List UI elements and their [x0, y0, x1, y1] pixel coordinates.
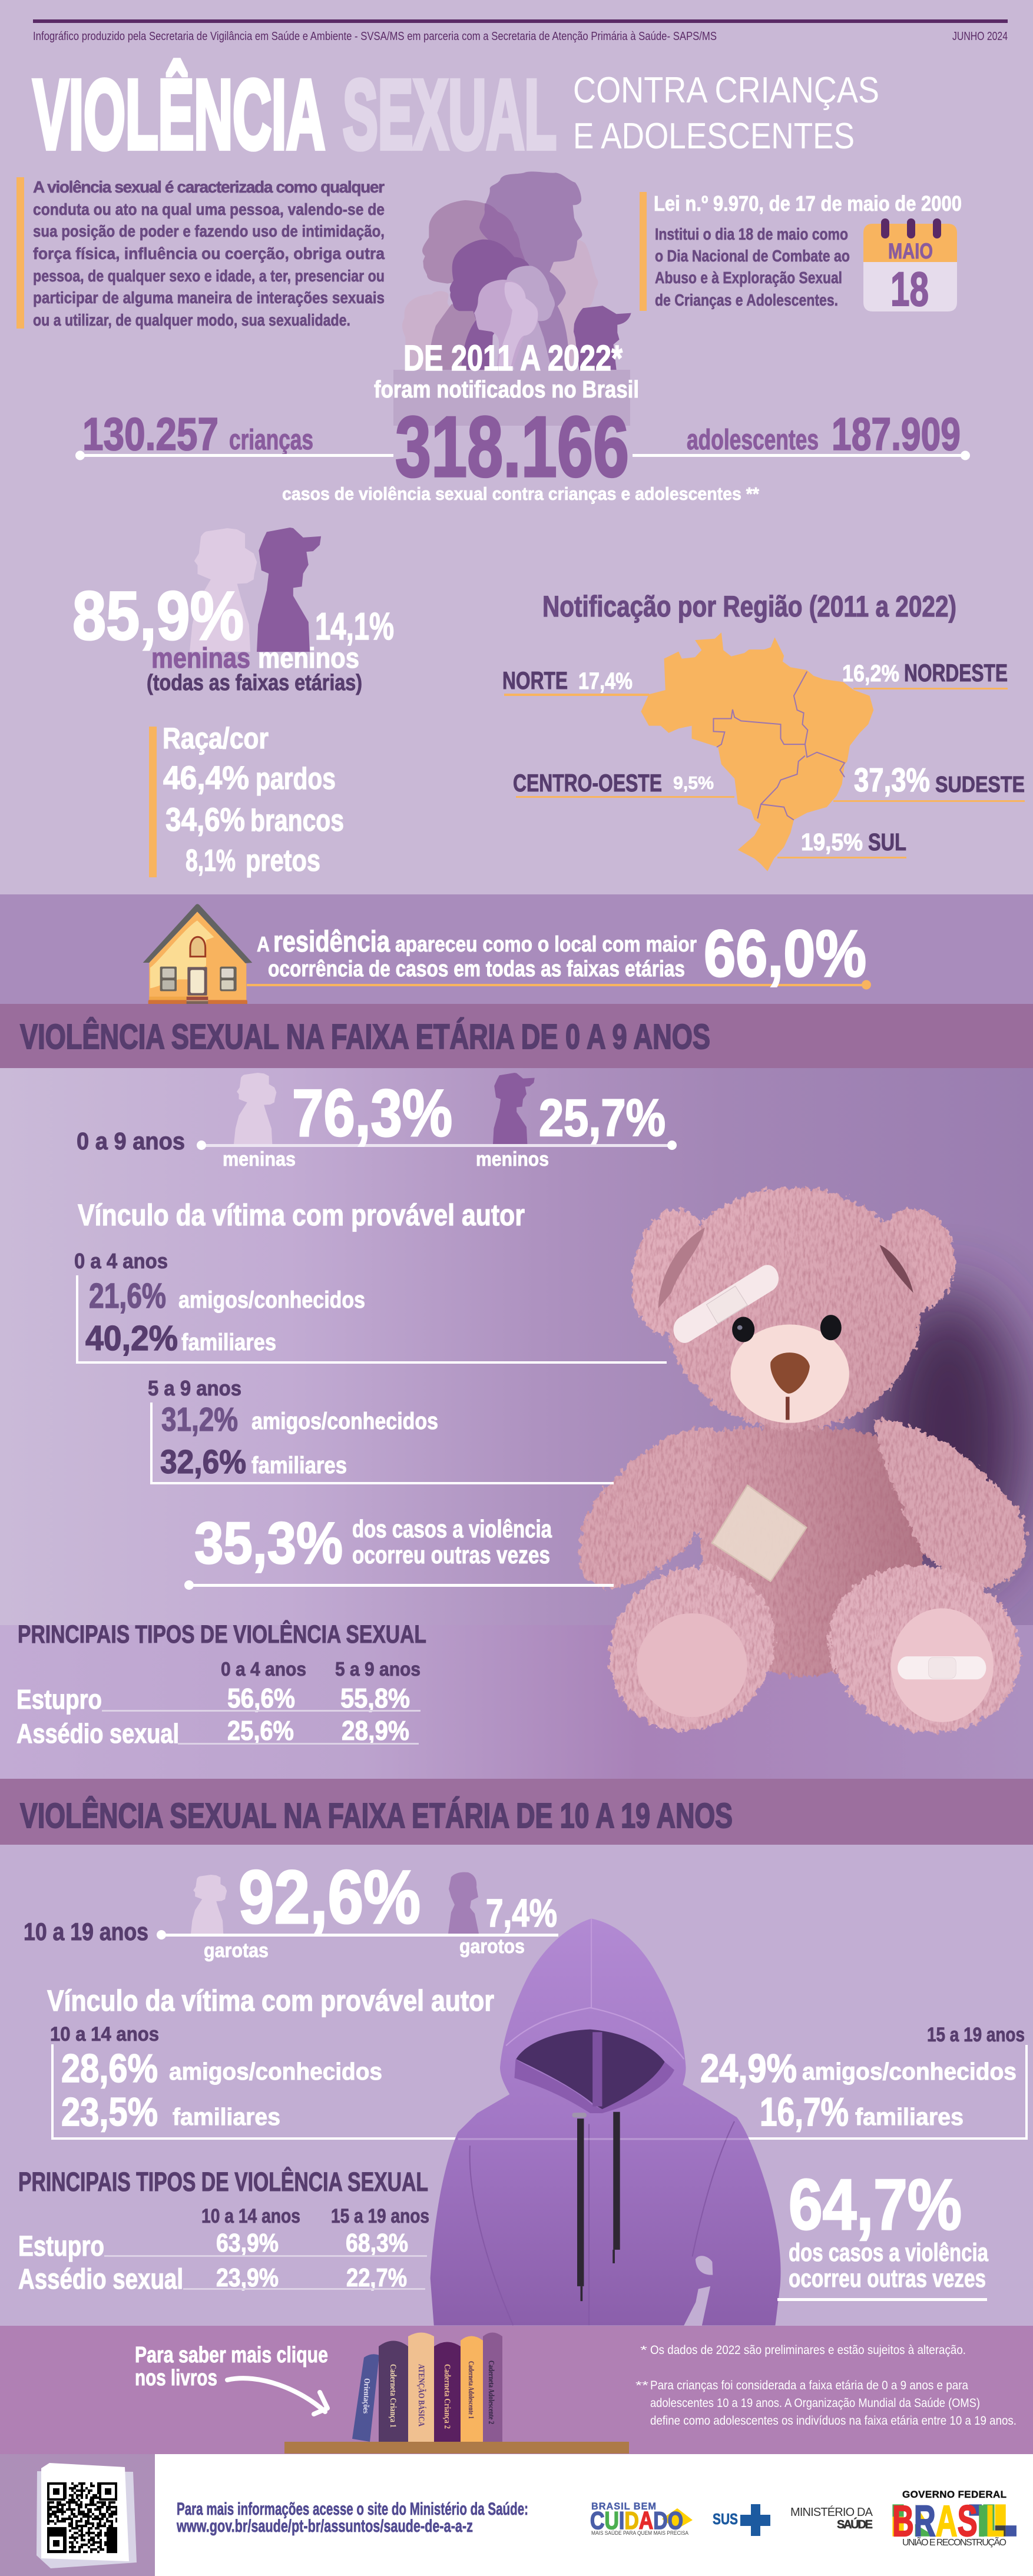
text block: footnotes: adolescentes 10 a 19 anos. A Organização Mundial da Saúde (OMS)	[650, 2396, 980, 2410]
title: SEXUAL	[343, 60, 557, 170]
panel: total cases: crianças	[229, 425, 313, 456]
text block: footnotes	[635, 2343, 1017, 2428]
text block: law: Lei n.º 9.970, de 17 de maio de 2000	[654, 191, 962, 216]
panel: total cases: 130.257	[82, 408, 218, 460]
panel: meninas e meninos 0 a 9 anos: 0 a 9 anos	[77, 1128, 185, 1155]
arrow: to books	[227, 2378, 327, 2414]
text block: definition: A violência sexual é caracterizada como qualquer	[33, 178, 385, 196]
panel: books band	[0, 2326, 1033, 2454]
logo: Ministério da Saúde: MINISTÉRIO DA	[790, 2505, 873, 2519]
text block: law: o Dia Nacional de Combate ao	[655, 247, 850, 265]
panel: residência: A	[257, 932, 270, 956]
text block: definition: pessoa, de qualquer sexo e idade, a ter, presenciar ou	[33, 267, 385, 285]
map labels: SUL	[868, 828, 906, 856]
panel: vínculo 0 a 9 anos: familiares	[181, 1330, 276, 1355]
panel: vínculo 10 a 19 anos: familiares	[855, 2103, 964, 2130]
text block: definition: ou a utilizar, de qualquer modo, sua sexualidade.	[33, 311, 350, 329]
illustration: silhouettes of people	[402, 171, 631, 370]
illustration: books on shelf: ATENÇÃO BÁSICA	[416, 2364, 427, 2426]
table: tipos 0 a 9 anos: Assédio sexual	[16, 1718, 179, 1749]
logo: Brasil Bem Cuidado: CUIDADO	[590, 2507, 683, 2534]
table: tipos 10 a 19 anos: Assédio sexual	[18, 2264, 183, 2295]
text block: definition: participar de alguma maneira de interações sexuais	[33, 289, 385, 307]
panel: vínculo 0 a 9 anos: 21,6%	[89, 1277, 166, 1315]
map labels	[502, 659, 1025, 858]
table: tipos 10 a 19 anos: 10 a 14 anos	[201, 2205, 300, 2227]
panel: raça/cor: Raça/cor	[163, 722, 269, 755]
panel: raça/cor: pardos	[256, 762, 336, 796]
text block: law: de Crianças e Adolescentes.	[655, 291, 838, 309]
panel: total cases: foram notificados no Brasil	[374, 376, 639, 403]
map: Brazil regions	[641, 632, 873, 871]
table: tipos 10 a 19 anos: 15 a 19 anos	[331, 2205, 429, 2227]
callout: 35,3%: dos casos a violência	[352, 1515, 552, 1543]
table: tipos 0 a 9 anos: 56,6%	[227, 1683, 295, 1713]
panel: meninas e meninos 10 a 19 anos: garotas	[204, 1940, 269, 1962]
text block: definition: conduta ou ato na qual uma pessoa, valendo-se de	[33, 200, 385, 218]
logo: Brasil Bem Cuidado: MAIS SAÚDE PARA QUEM MAIS PRECISA	[591, 2530, 688, 2536]
panel: residência: 66,0%	[704, 917, 866, 990]
map labels: 9,5%	[673, 773, 714, 793]
panel: meninas e meninos 10 a 19 anos: 10 a 19 anos	[24, 1918, 148, 1945]
illustration: books on shelf: Caderneta Criança 2	[442, 2364, 452, 2429]
panel: meninas e meninos: 85,9%	[72, 577, 244, 654]
illustration: books on shelf	[284, 2333, 629, 2454]
map labels: CENTRO-OESTE	[513, 769, 662, 797]
map labels: 19,5%	[801, 828, 863, 856]
illustration: books on shelf: Caderneta Adolescente 1	[467, 2361, 476, 2419]
panel: meninas e meninos: (todas as faixas etárias)	[147, 671, 362, 695]
panel: vínculo 10 a 19 anos	[47, 1984, 1025, 2134]
panel: vínculo 0 a 9 anos: amigos/conhecidos	[178, 1287, 365, 1313]
panel: meninas e meninos 0 a 9 anos: 76,3%	[292, 1076, 452, 1150]
illustration: books on shelf: Caderneta Adolescente 2	[486, 2360, 495, 2424]
panel: vínculo 0 a 9 anos: Vínculo da vítima com provável autor	[78, 1198, 525, 1232]
logo: SUS	[713, 2504, 770, 2536]
table: tipos 10 a 19 anos	[18, 2167, 429, 2295]
panel: vínculo 10 a 19 anos: familiares	[173, 2103, 280, 2130]
callout: 64,7%	[777, 2164, 989, 2301]
panel: background 10 a 19 anos	[0, 1845, 1033, 2326]
panel: vínculo 10 a 19 anos: Vínculo da vítima com provável autor	[47, 1984, 494, 2017]
text block: law	[640, 191, 962, 311]
logo: Governo Federal Brasil: GOVERNO FEDERAL	[902, 2489, 1006, 2500]
text block: footnotes: *	[640, 2344, 647, 2357]
panel: raça/cor	[149, 722, 344, 878]
panel: raça/cor: brancos	[250, 804, 344, 838]
panel: vínculo 0 a 9 anos: familiares	[251, 1453, 347, 1478]
logo: Ministério da Saúde: SAÚDE	[837, 2517, 873, 2531]
panel: background 0 a 9 anos	[0, 1068, 1033, 1779]
panel: total cases	[75, 338, 970, 504]
table: tipos 10 a 19 anos: Estupro	[18, 2231, 104, 2262]
logo: Brasil Bem Cuidado: BRASIL BEM	[591, 2501, 657, 2512]
panel: raça/cor: 8,1%	[186, 844, 236, 878]
panel: meninas e meninos 10 a 19 anos: 92,6%	[239, 1855, 421, 1940]
panel: meninas e meninos	[72, 528, 394, 695]
panel: vínculo 0 a 9 anos	[74, 1198, 667, 1483]
panel: raça/cor: pretos	[246, 844, 320, 878]
panel: vínculo 0 a 9 anos: 5 a 9 anos	[148, 1376, 241, 1400]
icon: house	[143, 904, 252, 1005]
map labels: 16,2%	[842, 661, 899, 687]
text block: definition: força física, influência ou coerção, obriga outra	[33, 244, 385, 263]
callout: 35,3%: ocorreu outras vezes	[352, 1541, 550, 1569]
logo: Governo Federal Brasil: UNIÃO E RECONSTRUÇÃO	[902, 2536, 1006, 2548]
table: tipos 0 a 9 anos: 28,9%	[342, 1715, 409, 1746]
logo: Governo Federal Brasil: BRASIL	[892, 2497, 1004, 2545]
text block: definition	[16, 177, 385, 329]
panel: vínculo 10 a 19 anos: 24,9%	[700, 2046, 797, 2091]
illustration: books on shelf: Orientações	[361, 2378, 371, 2414]
text block: footnotes: Os dados de 2022 são preliminares e estão sujeitos à alteração.	[650, 2343, 966, 2357]
logo: Ministério da Saúde	[790, 2505, 873, 2531]
icon: calendar 18 de maio	[863, 218, 957, 316]
header strip: JUNHO 2024	[952, 30, 1008, 43]
table: tipos 0 a 9 anos: PRINCIPAIS TIPOS DE VIOLÊNCIA SEXUAL	[18, 1620, 426, 1649]
panel: meninas e meninos 0 a 9 anos: meninas	[223, 1148, 296, 1171]
icon: calendar 18 de maio: 18	[890, 263, 929, 316]
panel: section heading 0 a 9 anos: VIOLÊNCIA SEXUAL NA FAIXA ETÁRIA DE 0 A 9 ANOS	[20, 1017, 710, 1056]
text block: more information: www.gov.br/saude/pt-br/assuntos/saude-de-a-a-z	[176, 2517, 473, 2536]
panel: residência: ocorrência de casos em todas as faixas etárias	[268, 957, 685, 982]
table: tipos 0 a 9 anos: 0 a 4 anos	[221, 1658, 306, 1680]
text block: footnotes: **	[635, 2379, 648, 2392]
panel: total cases: 318.166	[395, 399, 629, 495]
table: tipos 0 a 9 anos	[16, 1620, 426, 1749]
map labels: 37,3%	[854, 761, 930, 799]
logo: SUS: SUS	[713, 2510, 738, 2528]
text block: more information	[176, 2499, 528, 2536]
map labels: NORTE	[502, 667, 568, 694]
panel: meninas e meninos 0 a 9 anos: meninos	[476, 1148, 549, 1171]
table: tipos 10 a 19 anos: 68,3%	[346, 2229, 408, 2257]
panel: raça/cor: 34,6%	[165, 801, 245, 838]
panel: meninas e meninos 10 a 19 anos	[24, 1855, 558, 1962]
table: tipos 10 a 19 anos: 23,9%	[216, 2263, 279, 2292]
icon: QR code on paper	[37, 2463, 137, 2568]
title	[33, 60, 879, 170]
panel: meninas e meninos: meninos	[258, 643, 359, 674]
text block: law: Abuso e à Exploração Sexual	[655, 268, 842, 287]
table: tipos 0 a 9 anos: 55,8%	[340, 1683, 410, 1713]
panel: total cases: DE 2011 A 2022*	[403, 338, 623, 378]
text block: clique nos livros: Para saber mais clique	[135, 2343, 328, 2368]
panel: residência	[0, 894, 1033, 1004]
panel: total cases: 187.909	[832, 408, 961, 460]
table: tipos 10 a 19 anos: 63,9%	[216, 2229, 279, 2257]
bracket line: vínculo 10 a 19 anos	[52, 2044, 1027, 2139]
panel: meninas e meninos 10 a 19 anos: 7,4%	[486, 1891, 557, 1935]
panel: vínculo 0 a 9 anos: 0 a 4 anos	[74, 1249, 168, 1273]
panel: section heading 10 a 19 anos: VIOLÊNCIA SEXUAL NA FAIXA ETÁRIA DE 10 A 19 ANOS	[20, 1796, 733, 1835]
text block: more information: Para mais informações acesse o site do Ministério da Saúde:	[177, 2499, 528, 2519]
header strip: Infográfico produzido pela Secretaria de Vigilância em Saúde e Ambiente - SVSA/MS em parceria com a Secretaria de Atenção Primária à Saúde- SAPS/MS	[33, 30, 717, 43]
panel: section heading 0 a 9 anos	[0, 1004, 1033, 1068]
panel: meninas e meninos 0 a 9 anos	[77, 1073, 677, 1171]
panel: meninas e meninos 10 a 19 anos: garotos	[459, 1935, 525, 1958]
text block: law: Institui o dia 18 de maio como	[655, 225, 848, 243]
table: tipos 0 a 9 anos: Estupro	[16, 1684, 102, 1715]
text block: definition: sua posição de poder e fazendo uso de intimidação,	[33, 222, 385, 240]
panel: footer background	[0, 2454, 1033, 2576]
callout: 35,3%: 35,3%	[194, 1510, 343, 1576]
panel: vínculo 10 a 19 anos: 23,5%	[61, 2090, 158, 2134]
header strip	[33, 19, 1008, 43]
illustration: teddy bear	[580, 1187, 1029, 1751]
panel: vínculo 0 a 9 anos: amigos/conhecidos	[251, 1408, 438, 1434]
title: E ADOLESCENTES	[573, 116, 855, 157]
panel: vínculo 10 a 19 anos: 16,7%	[760, 2090, 849, 2134]
map labels: 17,4%	[578, 668, 633, 694]
table: tipos 0 a 9 anos: 25,6%	[227, 1715, 294, 1746]
panel: vínculo 10 a 19 anos: amigos/conhecidos	[169, 2058, 382, 2085]
panel: vínculo 10 a 19 anos: 28,6%	[61, 2046, 158, 2091]
callout: 64,7%: 64,7%	[789, 2164, 962, 2245]
panel: meninas e meninos: 14,1%	[315, 605, 394, 648]
table: tipos 10 a 19 anos: 22,7%	[346, 2263, 407, 2292]
panel: meninas e meninos 0 a 9 anos: 25,7%	[539, 1088, 666, 1147]
panel: residência: residência	[273, 925, 390, 958]
panel: vínculo 10 a 19 anos: amigos/conhecidos	[802, 2058, 1017, 2085]
text block: footnotes: Para crianças foi considerada a faixa etária de 0 a 9 anos e para	[650, 2379, 968, 2392]
callout: 35,3%	[184, 1510, 614, 1590]
panel: vínculo 0 a 9 anos: 40,2%	[85, 1319, 178, 1358]
panel: vínculo 0 a 9 anos: 32,6%	[160, 1443, 246, 1481]
panel: total cases: adolescentes	[687, 425, 819, 456]
text block: clique nos livros: nos livros	[135, 2366, 217, 2391]
panel: vínculo 10 a 19 anos: 10 a 14 anos	[50, 2023, 159, 2045]
text block: clique nos livros	[135, 2343, 328, 2391]
panel: raça/cor: 46,4%	[163, 759, 249, 796]
panel: meninas e meninos: meninas	[151, 643, 250, 674]
panel: total cases: casos de violência sexual contra crianças e adolescentes **	[282, 483, 760, 504]
illustration: books on shelf: Caderneta Criança 1	[388, 2364, 398, 2428]
illustration: hoodie	[431, 1918, 781, 2325]
table: tipos 10 a 19 anos: PRINCIPAIS TIPOS DE VIOLÊNCIA SEXUAL	[18, 2167, 428, 2197]
panel: vínculo 0 a 9 anos: 31,2%	[161, 1401, 238, 1438]
table: tipos 0 a 9 anos: 5 a 9 anos	[335, 1658, 421, 1680]
panel: residência: apareceu como o local com maior	[395, 932, 697, 956]
panel: section heading 10 a 19 anos	[0, 1779, 1033, 1845]
title: VIOLÊNCIA	[33, 60, 325, 170]
icon: calendar 18 de maio: MAIO	[888, 239, 933, 263]
title: CONTRA CRIANÇAS	[573, 70, 879, 111]
